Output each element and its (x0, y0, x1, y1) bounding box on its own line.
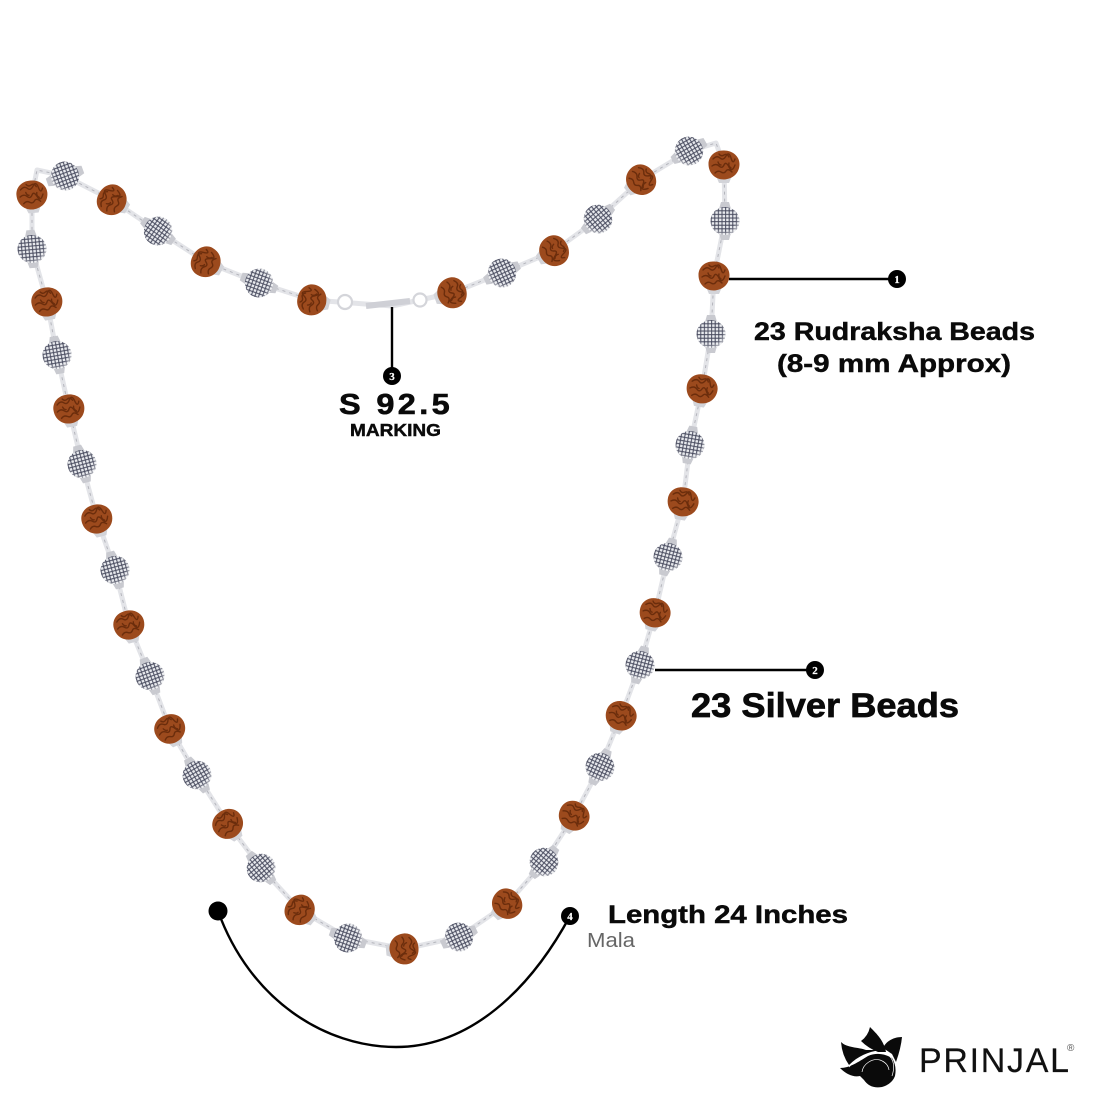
clasp (338, 294, 426, 309)
callout 3: S 92.5 marking (339, 307, 453, 440)
logo: Prinjal: ® (1067, 1043, 1075, 1054)
silver chain (32, 143, 725, 949)
callout 4: length arc: Length 24 Inches (608, 901, 848, 929)
callout 2: silver beads (655, 661, 959, 725)
callout 2: silver beads: 2 (812, 665, 818, 677)
logo icon (840, 1027, 902, 1087)
necklace (15, 129, 740, 966)
callout 3: S 92.5 marking: 3 (389, 371, 395, 383)
callout 4: length arc: 4 (567, 911, 573, 923)
callout 1: rudraksha beads (729, 270, 1035, 378)
callout 1: rudraksha beads: 23 Rudraksha Beads (754, 318, 1035, 346)
logo wordmark: PRINJAL (919, 1042, 1069, 1080)
callout 4: length arc (208, 901, 848, 1047)
callout 4: length arc: Mala (587, 930, 636, 952)
callout 3: S 92.5 marking: S 92.5 (339, 389, 453, 421)
silver beads (16, 129, 739, 958)
callout 3: S 92.5 marking: MARKING (350, 420, 441, 440)
logo: Prinjal (840, 1027, 1075, 1087)
callout 1: rudraksha beads: (8-9 mm Approx) (777, 350, 1011, 378)
rudraksha beads (15, 150, 740, 966)
callout 2: silver beads: 23 Silver Beads (691, 687, 959, 725)
callout 1: rudraksha beads: 1 (894, 274, 900, 286)
